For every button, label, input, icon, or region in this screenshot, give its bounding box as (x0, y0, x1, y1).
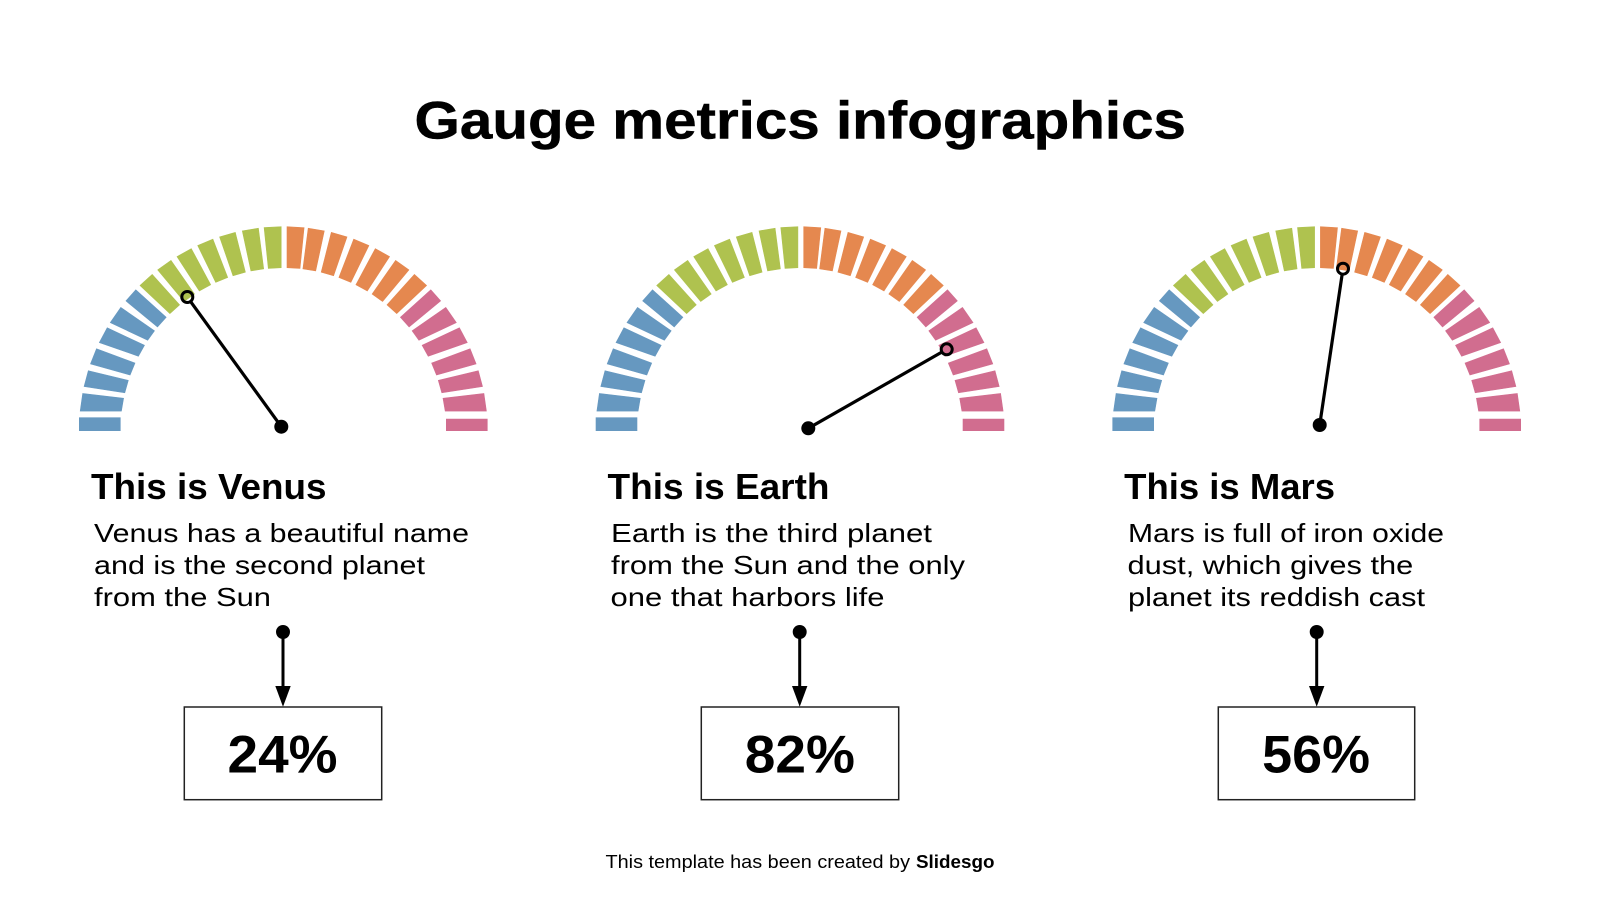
title: Gauge metrics infographics (414, 92, 1186, 150)
text block: Venus description: Venus has a beautiful name (94, 518, 469, 548)
gauge needle: Mars 56% (1313, 263, 1348, 432)
text block: Mars description (1128, 518, 1444, 612)
arrow: Mars (1309, 625, 1324, 707)
text block: Earth description: from the Sun and the only (611, 550, 965, 580)
gauge needle: Venus 24% (182, 292, 288, 434)
gauge needle: Earth 82% (801, 344, 952, 435)
text block: Earth description: one that harbors life (610, 582, 884, 612)
panel: Venus (79, 227, 487, 800)
gauge: Mars arc (1113, 227, 1521, 431)
gauge: Earth arc (596, 227, 1004, 431)
value box: 24% (184, 707, 382, 800)
text block: Venus description (94, 518, 469, 612)
value box: 82% (701, 707, 899, 800)
value box: 56% (1218, 707, 1415, 800)
panel: Earth (596, 227, 1004, 800)
value box: 24%: 24% (228, 726, 338, 784)
value box: 82%: 82% (745, 726, 855, 784)
arrow: Earth (792, 625, 807, 707)
heading: This is Earth: This is Earth (608, 466, 830, 507)
footer credit: This template has been created by (606, 851, 911, 872)
gauge: Venus arc (79, 227, 487, 431)
heading: This is Venus: This is Venus (91, 466, 326, 507)
footer credit: Slidesgo (916, 851, 994, 872)
text block: Mars description: Mars is full of iron oxide (1128, 518, 1444, 548)
text block: Mars description: planet its reddish cast (1128, 582, 1426, 612)
value box: 56%: 56% (1262, 726, 1370, 784)
text block: Venus description: and is the second planet (94, 550, 426, 580)
arrow: Venus (275, 625, 291, 707)
text block: Earth description: Earth is the third planet (611, 518, 933, 548)
heading: This is Mars: This is Mars (1124, 466, 1335, 507)
panel: Mars (1113, 227, 1521, 800)
text block: Earth description (610, 518, 965, 612)
text block: Venus description: from the Sun (94, 582, 271, 612)
text block: Mars description: dust, which gives the (1128, 550, 1413, 580)
